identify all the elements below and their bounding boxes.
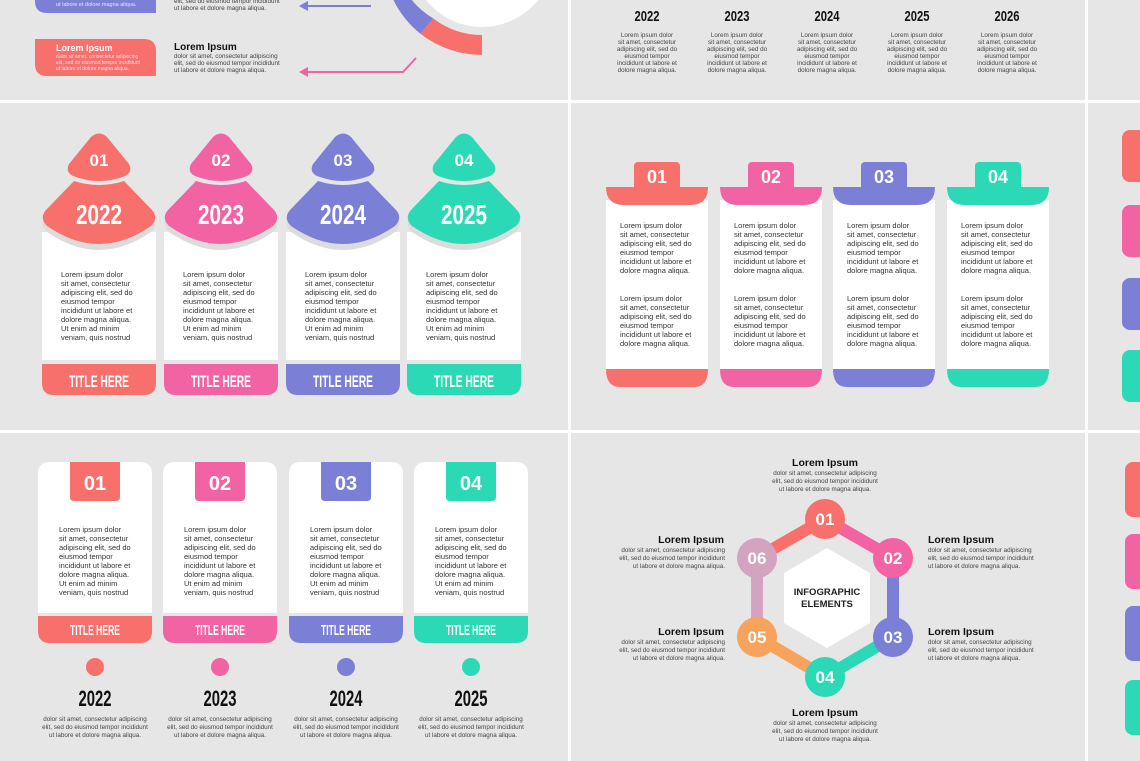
card 03	[833, 162, 935, 387]
node circles: 06	[748, 549, 766, 568]
card 03: Lorem ipsum dolor	[305, 270, 368, 279]
card 02: sit amet, consectetur	[734, 303, 804, 312]
card 04: 04	[455, 151, 474, 170]
label left upper: Lorem Ipsum	[658, 534, 724, 546]
card 02: 2023	[204, 686, 236, 711]
text block: Lorem Ipsum: elit, sed do eiusmod tempor incididunt	[174, 60, 280, 67]
card 02: Lorem ipsum dolor	[734, 294, 797, 303]
card 03: eiusmod tempor	[310, 552, 364, 561]
card 01	[606, 162, 708, 387]
card 01: TITLE HERE	[69, 372, 129, 391]
label top: Lorem Ipsum	[792, 457, 858, 469]
card 04: dolore magna aliqua.	[435, 570, 505, 579]
card 01: dolor sit amet, consectetur adipiscing	[43, 716, 147, 723]
label top: elit, sed do eiusmod tempor incididunt	[772, 478, 878, 485]
card 02: sit amet, consectetur	[184, 534, 254, 543]
card 04: incididunt ut labore et	[961, 330, 1033, 339]
panel: top-middle years timeline: incididunt ut labore et	[797, 60, 857, 67]
panel: top-middle years timeline: dolore magna aliqua.	[618, 67, 677, 74]
card 01: adipiscing elit, sed do	[61, 288, 133, 297]
card 04: eiusmod tempor	[426, 297, 480, 306]
card 03: sit amet, consectetur	[847, 230, 917, 239]
label bottom: Lorem Ipsum	[792, 707, 858, 719]
card 04: adipiscing elit, sed do	[961, 312, 1033, 321]
card 03: adipiscing elit, sed do	[310, 543, 382, 552]
card 02: Lorem ipsum dolor	[183, 270, 246, 279]
panel: top-middle years timeline: 2022	[634, 8, 660, 25]
purple label pill	[35, 0, 156, 13]
label right lower: elit, sed do eiusmod tempor incididunt	[928, 647, 1034, 654]
panel: top-middle years timeline: 2023	[724, 8, 750, 25]
card 01: sit amet, consectetur	[61, 279, 131, 288]
card 03: veniam, quis nostrud	[310, 588, 379, 597]
card 03: Lorem ipsum dolor	[847, 294, 910, 303]
card 01: ut labore et dolore magna aliqua.	[49, 732, 141, 739]
card 04: elit, sed do eiusmod tempor incididunt	[418, 724, 524, 731]
card 01: Ut enim ad minim	[59, 579, 117, 588]
panel: hexagon cycle diagram	[619, 457, 1034, 743]
card 03: sit amet, consectetur	[310, 534, 380, 543]
card 03	[289, 462, 403, 739]
card 02: Lorem ipsum dolor	[734, 221, 797, 230]
label right upper: dolor sit amet, consectetur adipiscing	[928, 547, 1032, 554]
label left lower: dolor sit amet, consectetur adipiscing	[621, 639, 725, 646]
card 01: Lorem ipsum dolor	[620, 221, 683, 230]
label left upper: ut labore et dolore magna aliqua.	[633, 563, 725, 570]
card 01: veniam, quis nostrud	[59, 588, 128, 597]
panel: top-middle years timeline: incididunt ut labore et	[617, 60, 677, 67]
label right lower: ut labore et dolore magna aliqua.	[928, 655, 1020, 662]
card 04: adipiscing elit, sed do	[426, 288, 498, 297]
card 02: adipiscing elit, sed do	[734, 312, 806, 321]
panel: top-middle years timeline: Lorem ipsum dolor	[801, 32, 853, 39]
card 04: incididunt ut labore et	[426, 306, 498, 315]
card 02: incididunt ut labore et	[734, 257, 806, 266]
card 02: Ut enim ad minim	[184, 579, 242, 588]
card 03: incididunt ut labore et	[310, 561, 382, 570]
center hexagon	[784, 548, 870, 648]
card 02: elit, sed do eiusmod tempor incididunt	[167, 724, 273, 731]
card 03: TITLE HERE	[321, 622, 371, 639]
panel: top-middle years timeline: sit amet, consectetur	[888, 39, 946, 46]
card 04: dolore magna aliqua.	[961, 339, 1031, 348]
card 01: sit amet, consectetur	[620, 230, 690, 239]
card 01: adipiscing elit, sed do	[620, 239, 692, 248]
panel: top-middle years timeline: adipiscing elit, sed do	[887, 46, 948, 53]
card 03: adipiscing elit, sed do	[305, 288, 377, 297]
panel: top-middle years timeline: eiusmod tempor	[624, 53, 670, 60]
card 01: dolore magna aliqua.	[61, 315, 131, 324]
card 01: dolore magna aliqua.	[620, 339, 690, 348]
panel: top-middle years timeline: adipiscing elit, sed do	[707, 46, 768, 53]
card 02: dolore magna aliqua.	[184, 570, 254, 579]
panel: top-middle years timeline: eiusmod tempor	[804, 53, 850, 60]
card 01: TITLE HERE	[70, 622, 120, 639]
panel: top-middle years timeline: eiusmod tempor	[894, 53, 940, 60]
card 02: dolore magna aliqua.	[183, 315, 253, 324]
panel: top-middle years timeline: dolore magna aliqua.	[798, 67, 857, 74]
card 03: dolore magna aliqua.	[305, 315, 375, 324]
panel: top-middle years timeline: incididunt ut labore et	[887, 60, 947, 67]
card 04: Lorem ipsum dolor	[435, 525, 498, 534]
card 03: incididunt ut labore et	[847, 257, 919, 266]
panel: top-middle years timeline: Lorem ipsum dolor	[891, 32, 943, 39]
coral label pill: dolor sit amet, consectetur adipiscing	[56, 54, 138, 60]
text block: top: ut labore et dolore magna aliqua.	[174, 5, 266, 12]
card 01: adipiscing elit, sed do	[620, 312, 692, 321]
label left lower: Lorem Ipsum	[658, 626, 724, 638]
panel: top-middle years timeline: dolore magna aliqua.	[978, 67, 1037, 74]
card 04: adipiscing elit, sed do	[961, 239, 1033, 248]
card 04: ut labore et dolore magna aliqua.	[425, 732, 517, 739]
panel: top-middle years timeline: adipiscing elit, sed do	[617, 46, 678, 53]
label top	[772, 457, 878, 493]
card 04: TITLE HERE	[434, 372, 494, 391]
card 01: Lorem ipsum dolor	[59, 525, 122, 534]
center hexagon: INFOGRAPHIC	[794, 587, 860, 598]
card 03: 03	[334, 151, 352, 170]
card 04: adipiscing elit, sed do	[435, 543, 507, 552]
text block: Lorem Ipsum: dolor sit amet, consectetur adipiscing	[174, 53, 278, 60]
panel: top-middle years timeline: eiusmod tempor	[984, 53, 1030, 60]
card 04: eiusmod tempor	[435, 552, 489, 561]
card 04: veniam, quis nostrud	[426, 333, 495, 342]
card 02: incididunt ut labore et	[184, 561, 256, 570]
card 02: Lorem ipsum dolor	[184, 525, 247, 534]
panel: top-middle years timeline	[617, 8, 1038, 74]
card 04: Lorem ipsum dolor	[961, 294, 1024, 303]
card 04	[407, 134, 521, 395]
card 04: sit amet, consectetur	[961, 303, 1031, 312]
card 03: incididunt ut labore et	[305, 306, 377, 315]
label bottom: dolor sit amet, consectetur adipiscing	[773, 720, 877, 727]
card 03	[286, 134, 400, 395]
label bottom: ut labore et dolore magna aliqua.	[779, 736, 871, 743]
card 02: dolor sit amet, consectetur adipiscing	[168, 716, 272, 723]
card 04: eiusmod tempor	[961, 248, 1015, 257]
panel: top-middle years timeline: sit amet, consectetur	[708, 39, 766, 46]
card 02: eiusmod tempor	[184, 552, 238, 561]
text block: top	[174, 0, 280, 12]
label right upper: ut labore et dolore magna aliqua.	[928, 563, 1020, 570]
coral label pill	[35, 39, 156, 76]
panel: top-middle years timeline: sit amet, consectetur	[978, 39, 1036, 46]
panel: top-middle years timeline: adipiscing elit, sed do	[797, 46, 858, 53]
panel: top-middle years timeline: Lorem ipsum dolor	[621, 32, 673, 39]
card 02: 02	[212, 151, 230, 170]
card 01: sit amet, consectetur	[620, 303, 690, 312]
card 01: Ut enim ad minim	[61, 324, 119, 333]
card 04: Lorem ipsum dolor	[426, 270, 489, 279]
card 01: 01	[647, 167, 667, 187]
card 04: incididunt ut labore et	[961, 257, 1033, 266]
label bottom	[772, 707, 878, 743]
card 03: 2024	[330, 686, 363, 711]
panel: top-middle years timeline: eiusmod tempor	[714, 53, 760, 60]
panel: top-middle years timeline: sit amet, consectetur	[798, 39, 856, 46]
panel: top-middle years timeline: 2024	[814, 8, 840, 25]
text block: Lorem Ipsum	[174, 42, 280, 74]
card 01: 2022	[76, 199, 122, 230]
card 01: incididunt ut labore et	[620, 257, 692, 266]
label right lower	[928, 626, 1034, 662]
label right lower: Lorem Ipsum	[928, 626, 994, 638]
panel: top-middle years timeline: 2026	[994, 8, 1020, 25]
node circles: 04	[816, 668, 835, 687]
card 03: eiusmod tempor	[847, 248, 901, 257]
card 04: Lorem ipsum dolor	[961, 221, 1024, 230]
card 04: 2025	[454, 686, 488, 711]
card 03: TITLE HERE	[313, 372, 373, 391]
card 01: incididunt ut labore et	[59, 561, 131, 570]
panel: top-middle years timeline: Lorem ipsum dolor	[711, 32, 763, 39]
card 03: adipiscing elit, sed do	[847, 239, 919, 248]
label right upper	[928, 534, 1034, 570]
card 04: dolore magna aliqua.	[426, 315, 496, 324]
card 03: 2024	[320, 199, 366, 230]
card 02: sit amet, consectetur	[734, 230, 804, 239]
label left upper: elit, sed do eiusmod tempor incididunt	[619, 555, 725, 562]
card 04	[414, 462, 528, 739]
node circles: 01	[816, 510, 834, 529]
donut chart	[393, 0, 554, 55]
card 04: sit amet, consectetur	[435, 534, 505, 543]
card 04: TITLE HERE	[446, 622, 496, 639]
node circles: 02	[884, 549, 902, 568]
card 03: dolore magna aliqua.	[847, 339, 917, 348]
label right upper: Lorem Ipsum	[928, 534, 994, 546]
panel: top-middle years timeline: Lorem ipsum dolor	[981, 32, 1033, 39]
card 04: sit amet, consectetur	[961, 230, 1031, 239]
text block: Lorem Ipsum: Lorem Ipsum	[174, 42, 237, 53]
node circles: 05	[748, 628, 766, 647]
panel: top-left list slide	[35, 0, 554, 77]
card 04: veniam, quis nostrud	[435, 588, 504, 597]
card 04: incididunt ut labore et	[435, 561, 507, 570]
card 02: dolore magna aliqua.	[734, 339, 804, 348]
card 02	[720, 162, 822, 387]
card 02: 2023	[198, 199, 244, 230]
card 03: adipiscing elit, sed do	[847, 312, 919, 321]
card 04: eiusmod tempor	[961, 321, 1015, 330]
text block: Lorem Ipsum: ut labore et dolore magna aliqua.	[174, 67, 266, 74]
label left upper	[619, 534, 725, 570]
card 01: dolore magna aliqua.	[620, 266, 690, 275]
panel: top-middle years timeline: incididunt ut labore et	[707, 60, 767, 67]
card 01: veniam, quis nostrud	[61, 333, 130, 342]
card 02: veniam, quis nostrud	[184, 588, 253, 597]
coral label pill: elit, sed do eiusmod tempor incididunt	[56, 60, 141, 66]
node circles	[737, 499, 913, 697]
card 03: Lorem ipsum dolor	[847, 221, 910, 230]
card 02: 02	[209, 473, 231, 495]
card 01: eiusmod tempor	[620, 321, 674, 330]
card 02: incididunt ut labore et	[183, 306, 255, 315]
card 02: sit amet, consectetur	[183, 279, 253, 288]
card 01: 01	[84, 473, 106, 495]
panel: top-middle years timeline: 2025	[904, 8, 930, 25]
card 01: 01	[90, 151, 108, 170]
arrow: purple	[299, 1, 371, 11]
card 03: dolore magna aliqua.	[847, 266, 917, 275]
card 01	[38, 462, 152, 739]
card 04: 04	[460, 473, 483, 495]
card 03: 03	[874, 167, 894, 187]
card 02: eiusmod tempor	[734, 321, 788, 330]
purple label pill: ut labore et dolore magna aliqua.	[56, 2, 137, 8]
card 03: eiusmod tempor	[305, 297, 359, 306]
panel: right edge tabs	[1122, 130, 1140, 735]
label right lower: dolor sit amet, consectetur adipiscing	[928, 639, 1032, 646]
label left lower: elit, sed do eiusmod tempor incididunt	[619, 647, 725, 654]
card 01: incididunt ut labore et	[620, 330, 692, 339]
card 02: veniam, quis nostrud	[183, 333, 252, 342]
card 04	[947, 162, 1049, 387]
card 02	[163, 462, 277, 739]
card 03: Lorem ipsum dolor	[310, 525, 373, 534]
card 01: adipiscing elit, sed do	[59, 543, 131, 552]
card 03: eiusmod tempor	[847, 321, 901, 330]
card 02: adipiscing elit, sed do	[183, 288, 255, 297]
card 03: dolor sit amet, consectetur adipiscing	[294, 716, 398, 723]
card 01: eiusmod tempor	[620, 248, 674, 257]
card 04: dolor sit amet, consectetur adipiscing	[419, 716, 523, 723]
card 01: Lorem ipsum dolor	[61, 270, 124, 279]
panel: bottom-left card timeline	[38, 462, 528, 739]
card 04: Ut enim ad minim	[426, 324, 484, 333]
card 03: Ut enim ad minim	[305, 324, 363, 333]
card 04: sit amet, consectetur	[426, 279, 496, 288]
card 01: sit amet, consectetur	[59, 534, 129, 543]
card 02: 02	[761, 167, 781, 187]
card 02: Ut enim ad minim	[183, 324, 241, 333]
card 01: eiusmod tempor	[61, 297, 115, 306]
coral label pill: Lorem Ipsum	[56, 43, 113, 53]
card 02: eiusmod tempor	[734, 248, 788, 257]
center hexagon: ELEMENTS	[801, 599, 853, 610]
arrow: pink	[299, 58, 416, 77]
card 02: eiusmod tempor	[183, 297, 237, 306]
label top: ut labore et dolore magna aliqua.	[779, 486, 871, 493]
card 03: ut labore et dolore magna aliqua.	[300, 732, 392, 739]
card 01: elit, sed do eiusmod tempor incididunt	[42, 724, 148, 731]
panel: middle-left cone timeline	[42, 134, 521, 395]
card 03: sit amet, consectetur	[847, 303, 917, 312]
card 03: sit amet, consectetur	[305, 279, 375, 288]
label bottom: elit, sed do eiusmod tempor incididunt	[772, 728, 878, 735]
card 01	[42, 134, 156, 395]
card 04: 04	[988, 167, 1008, 187]
card 02: dolore magna aliqua.	[734, 266, 804, 275]
panel: top-middle years timeline: dolore magna aliqua.	[888, 67, 947, 74]
panel: top-middle years timeline: incididunt ut labore et	[977, 60, 1037, 67]
label right upper: elit, sed do eiusmod tempor incididunt	[928, 555, 1034, 562]
card 03: Ut enim ad minim	[310, 579, 368, 588]
card 03: elit, sed do eiusmod tempor incididunt	[293, 724, 399, 731]
card 01: dolore magna aliqua.	[59, 570, 129, 579]
coral label pill: ut labore et dolore magna aliqua.	[56, 66, 129, 72]
card 02: adipiscing elit, sed do	[734, 239, 806, 248]
card 03: veniam, quis nostrud	[305, 333, 374, 342]
panel: top-middle years timeline: sit amet, consectetur	[618, 39, 676, 46]
label left lower: ut labore et dolore magna aliqua.	[633, 655, 725, 662]
card 03: incididunt ut labore et	[847, 330, 919, 339]
panel: middle-center tab cards	[606, 162, 1049, 387]
card 02: incididunt ut labore et	[734, 330, 806, 339]
card 04: dolore magna aliqua.	[961, 266, 1031, 275]
card 01: Lorem ipsum dolor	[620, 294, 683, 303]
card 01: 2022	[78, 686, 112, 711]
card 03: dolore magna aliqua.	[310, 570, 380, 579]
card 04: Ut enim ad minim	[435, 579, 493, 588]
card 04: 2025	[441, 199, 487, 230]
label left upper: dolor sit amet, consectetur adipiscing	[621, 547, 725, 554]
card 02: TITLE HERE	[195, 622, 245, 639]
card 01: eiusmod tempor	[59, 552, 113, 561]
card 01: incididunt ut labore et	[61, 306, 133, 315]
panel: top-middle years timeline: adipiscing elit, sed do	[977, 46, 1038, 53]
card 03: 03	[335, 473, 357, 495]
connectors	[757, 519, 893, 677]
label top: dolor sit amet, consectetur adipiscing	[773, 470, 877, 477]
card 02: TITLE HERE	[191, 372, 251, 391]
card 02: adipiscing elit, sed do	[184, 543, 256, 552]
card 02: ut labore et dolore magna aliqua.	[174, 732, 266, 739]
label left lower	[619, 626, 725, 662]
panel: top-middle years timeline: dolore magna aliqua.	[708, 67, 767, 74]
card 02	[164, 134, 278, 395]
node circles: 03	[884, 628, 902, 647]
